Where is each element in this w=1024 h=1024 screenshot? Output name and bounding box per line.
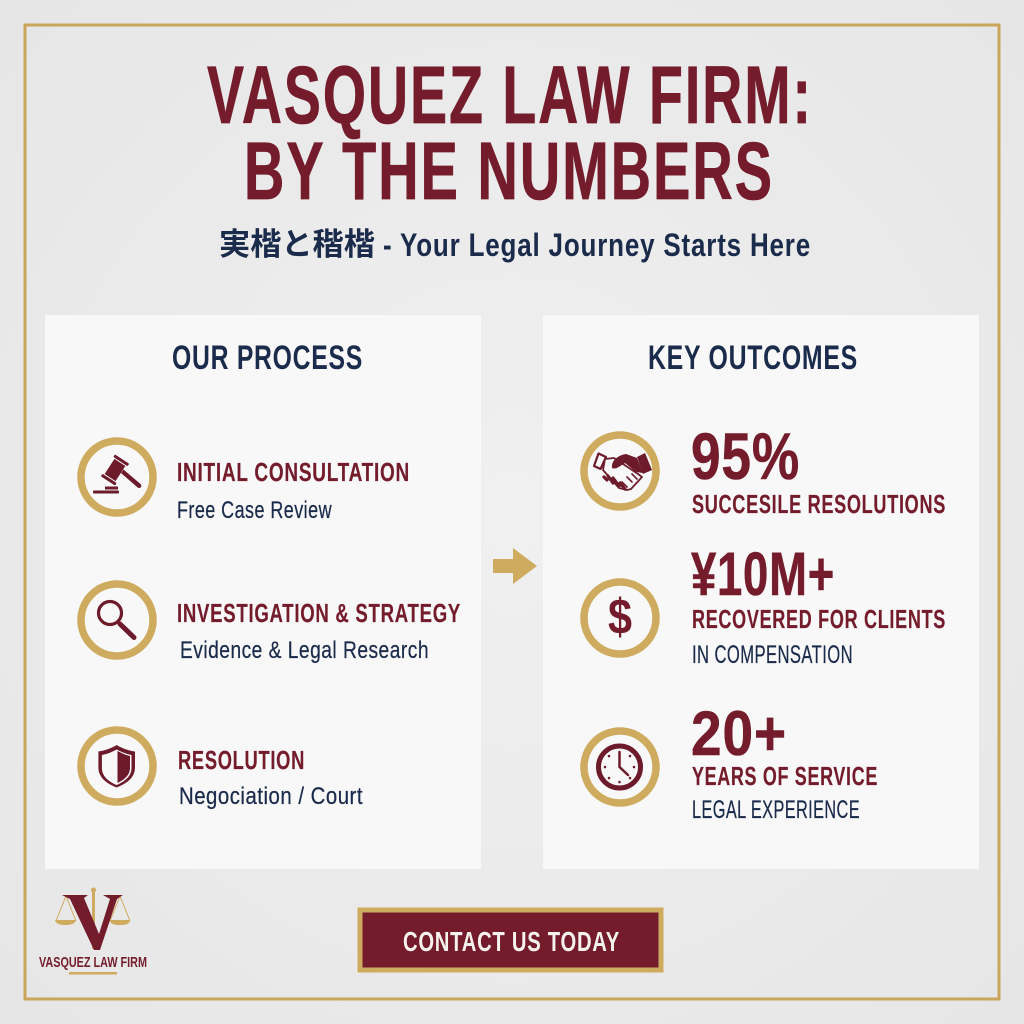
label: initial consultation: INITIAL CONSULTATION: [177, 457, 410, 487]
outcome: successful resolutions: [584, 419, 946, 519]
icon: dollar: $: [608, 589, 632, 645]
contact button: CONTACT US TODAY: [403, 926, 620, 957]
step: investigation and strategy: [81, 584, 461, 664]
title: BY THE NUMBERS: [244, 126, 774, 217]
panel: key outcomes: [543, 315, 979, 869]
statistic: 10M+: ¥10M+: [691, 540, 835, 608]
logo: [39, 888, 147, 974]
icon: dollar: [584, 582, 656, 654]
logo: firm name: VASQUEZ LAW FIRM: [39, 954, 147, 971]
description: free case review: Free Case Review: [177, 497, 332, 524]
heading: our process: OUR PROCESS: [172, 339, 363, 377]
title: [207, 50, 813, 217]
panel: our process: [45, 315, 481, 869]
description: negotiation or court: Negociation / Court: [179, 783, 363, 810]
icon: handshake: [584, 435, 656, 507]
subtitle: - Your Legal Journey Starts Here: [383, 227, 811, 263]
description: evidence and legal research: Evidence & Legal Research: [180, 637, 429, 664]
statistic: 20+: 20+: [691, 699, 787, 769]
icon: gavel: [81, 441, 153, 513]
outcome: years: [584, 699, 878, 824]
step: resolution: [81, 730, 363, 810]
outcome: recovered: [584, 540, 946, 669]
label: resolution: RESOLUTION: [178, 745, 305, 775]
statistic: 95%: 95%: [691, 419, 800, 493]
subtitle: 実楷と稭楷: [219, 227, 375, 262]
icon: shield: [81, 730, 153, 802]
logo: underline: [69, 972, 117, 974]
logo: scales: [55, 888, 130, 949]
contact button: [360, 910, 661, 970]
label: investigation and strategy: INVESTIGATION & STRATEGY: [177, 598, 461, 628]
label: years of service: YEARS OF SERVICE: [692, 761, 878, 791]
description: legal experience: LEGAL EXPERIENCE: [692, 796, 860, 824]
heading: key outcomes: KEY OUTCOMES: [648, 339, 858, 377]
step: initial consultation: [81, 441, 410, 524]
logo: V monogram: [62, 895, 123, 950]
icon: clock: [584, 731, 656, 803]
arrow: [493, 548, 537, 584]
description: in compensation: IN COMPENSATION: [692, 641, 853, 669]
subtitle: [219, 227, 811, 263]
icon: magnifier: [81, 584, 153, 656]
